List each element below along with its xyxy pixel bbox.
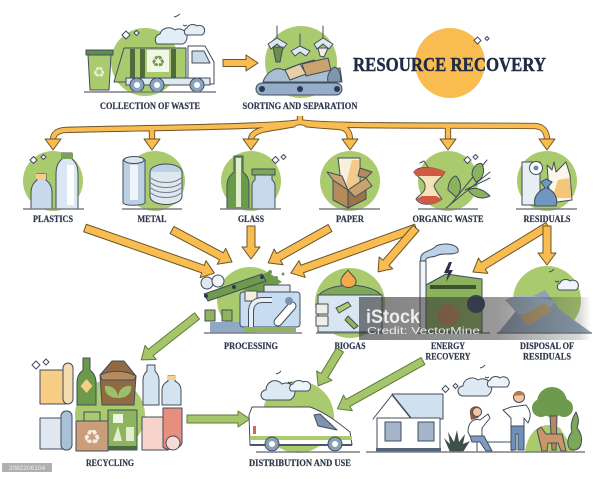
icon: people, tree and dog garden scene <box>366 365 585 452</box>
arrow: collection to sorting <box>223 55 258 71</box>
arrow: biogas to distribution <box>310 345 348 391</box>
icon: disposal of residuals landfill <box>497 266 592 334</box>
label: organic waste: ORGANIC WASTE <box>412 214 484 224</box>
label: recycling: RECYCLING <box>86 458 134 468</box>
icon: recycling materials group: ♻ <box>83 425 101 449</box>
arrow: organic waste to biogas <box>371 222 423 278</box>
icon: collection of waste truck: ♻ <box>93 65 105 81</box>
icon: title sun circle <box>415 28 485 98</box>
icon: sparkles near title <box>474 36 489 44</box>
icon: glass <box>220 151 286 211</box>
watermark: stock credit band: iStock <box>366 307 420 328</box>
icon: organic waste <box>413 151 490 211</box>
arrow: residuals to disposal <box>538 226 556 265</box>
arrow: plastics to processing <box>82 220 217 282</box>
watermark: stock credit band <box>359 297 591 340</box>
label: disposal of residuals: DISPOSAL OF <box>520 341 574 351</box>
watermark: image id tag <box>2 463 52 472</box>
icon: sorting and separation conveyor <box>256 26 342 98</box>
icon: paper box <box>319 151 380 211</box>
label: disposal line two: RESIDUALS <box>523 352 571 362</box>
arrow: residuals to energy recovery <box>468 218 553 280</box>
icon: metal <box>122 151 185 211</box>
title: RESOURCE RECOVERY <box>353 54 546 76</box>
label: sorting and separation: SORTING AND SEPARATION <box>242 101 358 111</box>
watermark: image id tag: 2082206104 <box>9 465 45 472</box>
arrow: glass to processing <box>242 226 260 259</box>
arrows: branching distribution tree <box>45 116 555 150</box>
icon: biogas tank <box>315 268 385 338</box>
label: glass: GLASS <box>238 214 264 224</box>
label: collection of waste: COLLECTION OF WASTE <box>100 101 200 111</box>
icon: collection of waste truck <box>84 14 216 96</box>
icon: collection of waste truck: ♻ <box>151 52 165 71</box>
icon: residuals <box>516 151 577 211</box>
arrow: metal to processing <box>168 222 236 270</box>
icon: recycling materials group <box>32 358 182 451</box>
label: distribution and use: DISTRIBUTION AND USE <box>249 458 351 468</box>
label: metal: METAL <box>138 214 166 224</box>
arrow: processing to recycling <box>136 309 203 367</box>
watermark: stock credit band: Credit: VectorMine <box>367 325 480 337</box>
arrow: organic waste to processing <box>288 220 419 282</box>
label: energy recovery line two: RECOVERY <box>426 352 471 362</box>
label: plastics: PLASTICS <box>33 214 73 224</box>
icon: house <box>373 394 443 452</box>
icon: distribution van with clouds <box>249 371 360 453</box>
label: biogas: BIOGAS <box>334 341 366 351</box>
arrow: recycling to distribution <box>187 411 250 427</box>
arrow: energy recovery to distribution <box>333 353 427 417</box>
icon: processing machine <box>201 267 302 333</box>
label: residuals: RESIDUALS <box>524 214 570 224</box>
label: energy recovery: ENERGY <box>431 341 465 351</box>
icon: plastics <box>23 151 84 211</box>
label: paper: PAPER <box>336 214 364 224</box>
icon: energy recovery plant <box>414 244 490 333</box>
arrow: paper to processing <box>264 220 334 271</box>
label: processing: PROCESSING <box>224 341 278 351</box>
